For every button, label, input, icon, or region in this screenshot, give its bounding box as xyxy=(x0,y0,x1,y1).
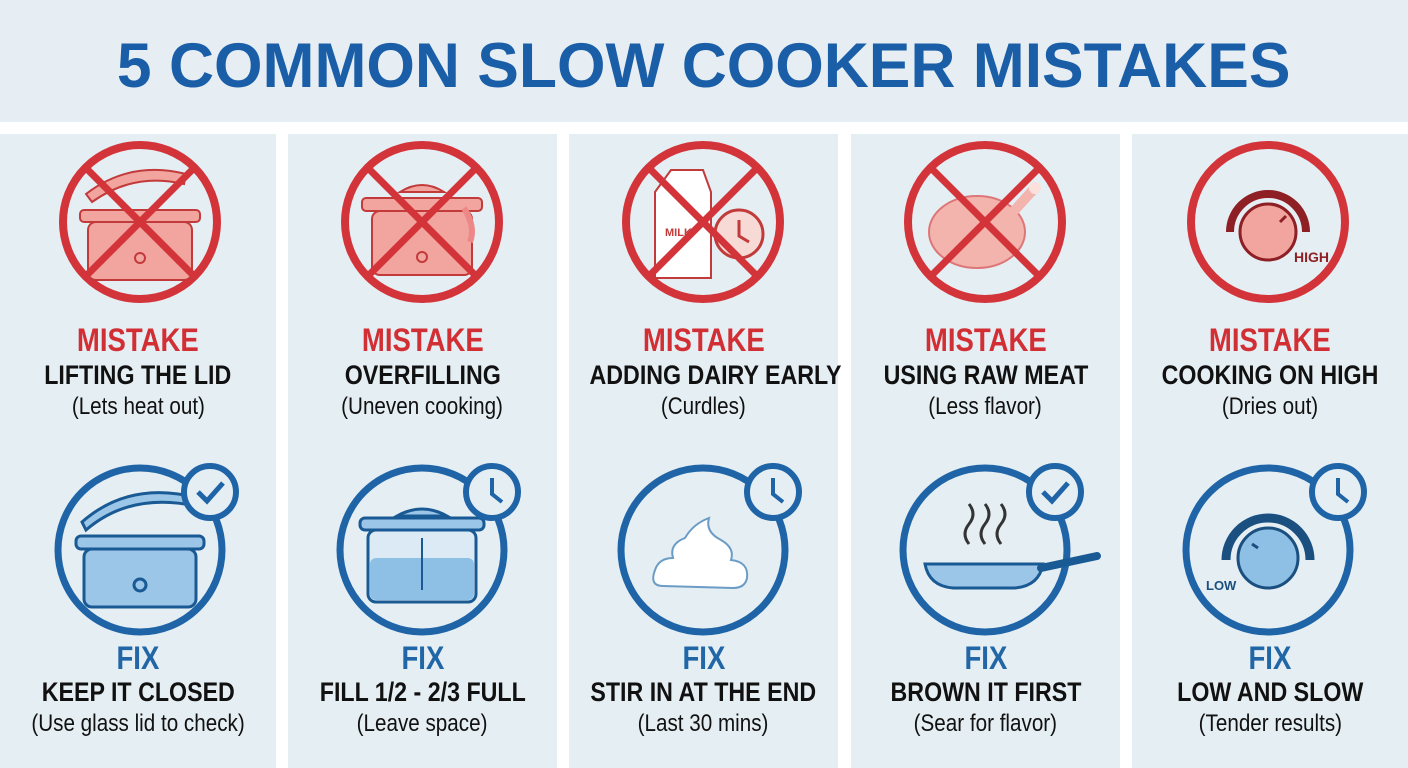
title band xyxy=(0,0,1408,122)
panel: using raw meat xyxy=(851,134,1120,768)
title: 5 COMMON SLOW COOKER MISTAKES xyxy=(117,31,1291,101)
mistake note: (Curdles) xyxy=(661,393,746,420)
panel: adding dairy early xyxy=(569,134,838,768)
fix label: FIX xyxy=(682,640,725,676)
icon: dial set to low with clock: LOW xyxy=(1206,578,1237,593)
mistake note: (Lets heat out) xyxy=(71,393,205,420)
icon: crossed milk carton and clock: MILK xyxy=(665,227,692,239)
fix label: FIX xyxy=(964,640,1007,676)
icon: half-filled pot with clock xyxy=(336,463,521,636)
fix note: (Tender results) xyxy=(1198,710,1342,737)
fix note: (Leave space) xyxy=(357,710,488,737)
panel: lifting the lid xyxy=(0,134,276,768)
icon: cream swirl with clock xyxy=(618,463,802,636)
icon: crossed slow cooker lid xyxy=(59,141,221,303)
fix text: KEEP IT CLOSED xyxy=(41,677,235,707)
icon: dial set to low with clock xyxy=(1182,463,1367,636)
mistake text: ADDING DAIRY EARLY xyxy=(590,360,842,390)
fix note: (Sear for flavor) xyxy=(914,710,1057,737)
mistake label: MISTAKE xyxy=(77,322,199,358)
mistake label: MISTAKE xyxy=(643,322,764,358)
panel: cooking on high xyxy=(1132,134,1408,768)
mistake text: OVERFILLING xyxy=(344,360,501,390)
mistake text: COOKING ON HIGH xyxy=(1162,360,1378,390)
fix text: FILL 1/2 - 2/3 FULL xyxy=(319,677,525,707)
icon: dial set to high xyxy=(1187,141,1349,303)
icon: crossed overflowing pot xyxy=(341,141,503,303)
fix note: (Use glass lid to check) xyxy=(31,710,245,737)
mistake text: USING RAW MEAT xyxy=(883,360,1088,390)
mistake note: (Uneven cooking) xyxy=(342,393,503,420)
icon: covered slow cooker with check xyxy=(54,463,239,636)
mistake note: (Dries out) xyxy=(1222,393,1318,420)
fix label: FIX xyxy=(401,640,444,676)
mistake label: MISTAKE xyxy=(925,322,1046,358)
mistake label: MISTAKE xyxy=(362,322,483,358)
fix note: (Last 30 mins) xyxy=(638,710,769,737)
mistake text: LIFTING THE LID xyxy=(44,360,232,390)
panel: overfilling xyxy=(288,134,557,768)
icon: crossed milk carton and clock xyxy=(622,141,784,303)
mistake label: MISTAKE xyxy=(1209,322,1331,358)
icon: crossed raw chicken xyxy=(904,141,1066,303)
icon: dial set to high: HIGH xyxy=(1294,249,1329,265)
fix label: FIX xyxy=(1249,640,1291,676)
fix label: FIX xyxy=(117,640,159,676)
fix text: BROWN IT FIRST xyxy=(890,677,1081,707)
icon: frying pan with steam and check xyxy=(900,463,1101,636)
fix text: STIR IN AT THE END xyxy=(591,677,816,707)
fix text: LOW AND SLOW xyxy=(1177,677,1363,707)
mistake note: (Less flavor) xyxy=(929,393,1042,420)
